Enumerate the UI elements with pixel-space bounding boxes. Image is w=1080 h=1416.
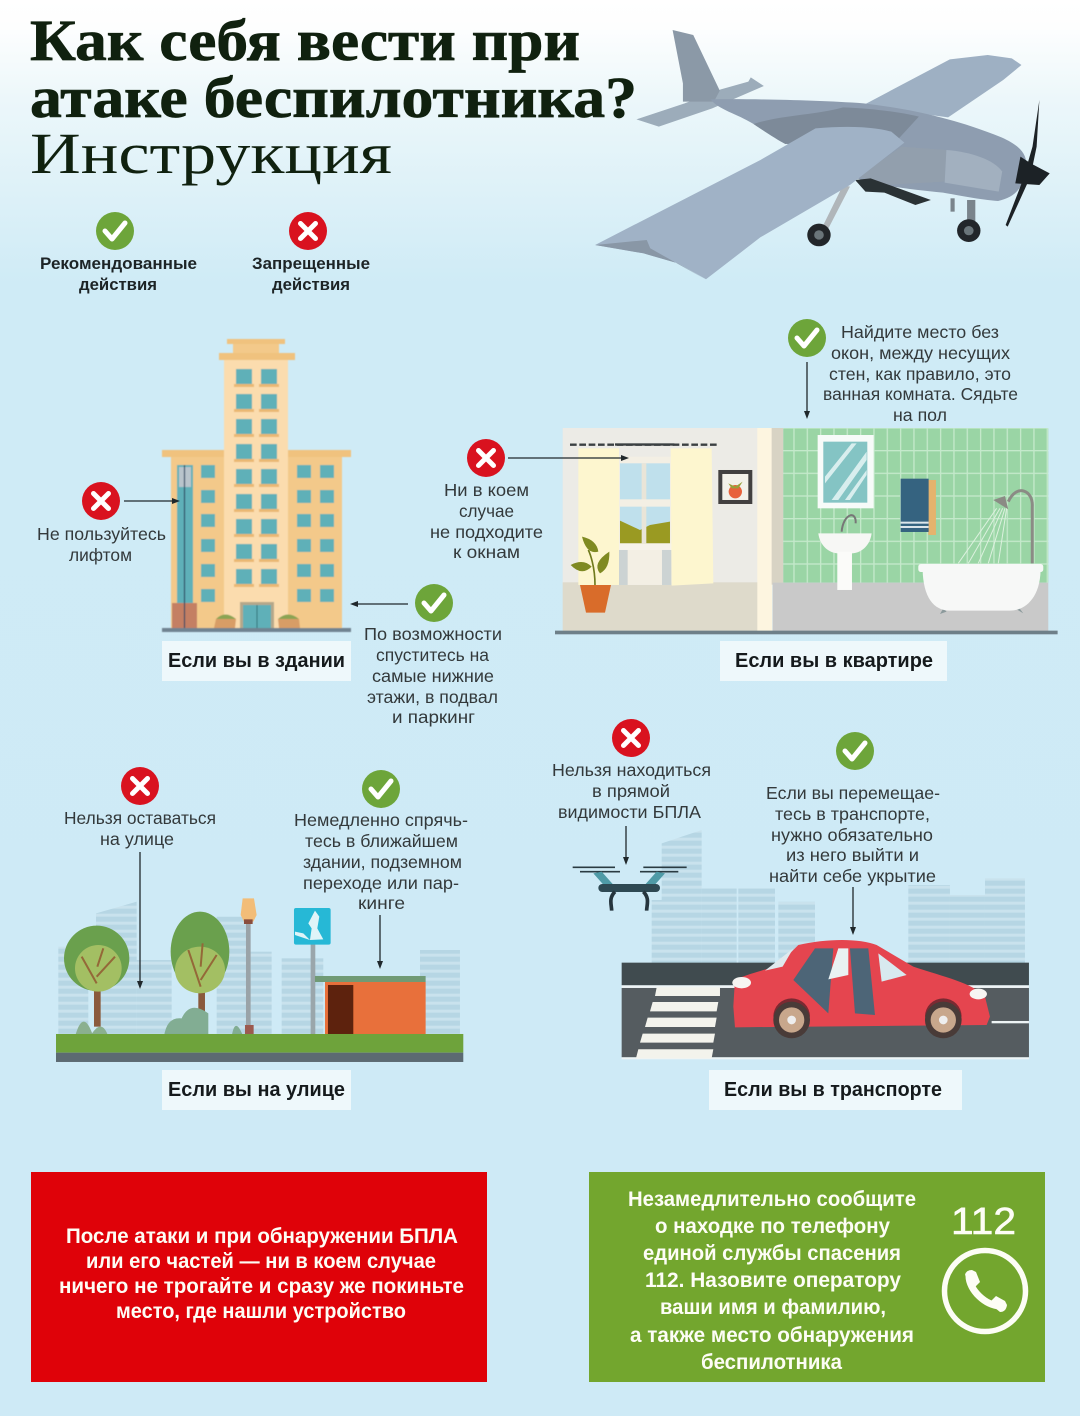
arrow: to elevator <box>124 498 180 504</box>
arrow: to drone <box>623 826 629 865</box>
callout: bathroom shelter: ванная комната. Сядьте <box>823 384 1018 404</box>
callout: avoid windows: не подходите <box>430 522 543 542</box>
icon: red cross <box>82 482 120 520</box>
legend: forbidden: действия <box>272 275 350 294</box>
road <box>622 963 1029 1059</box>
callout: no elevator: Не пользуйтесь <box>37 524 166 544</box>
callout: bathroom shelter: на пол <box>893 405 947 425</box>
callout: avoid windows: к окнам <box>453 542 520 562</box>
callout: line of sight: в прямой <box>592 781 670 801</box>
callout: leave vehicle <box>766 732 940 886</box>
curtain rod <box>570 441 717 448</box>
callout: go downstairs: По возможности <box>364 624 502 644</box>
callout: bathroom shelter: стен, как правило, это <box>829 364 1011 384</box>
callout: leave vehicle: тесь в транспорте, <box>775 804 930 824</box>
callout: go downstairs <box>364 584 502 727</box>
tree 1 <box>64 926 129 1037</box>
callout: go downstairs: спуститесь на <box>376 645 489 665</box>
title: Как себя вести при <box>30 8 580 73</box>
picture <box>718 470 752 504</box>
callout: hide immediately: кинге <box>358 893 405 913</box>
callout: leave vehicle: из него выйти и <box>786 845 919 865</box>
icon: red cross <box>289 212 327 250</box>
panel: after the attack: ничего не трогайте и сразу же покиньте <box>59 1275 464 1298</box>
callout: leave vehicle: Если вы перемещае- <box>766 783 940 803</box>
legend: recommended: действия <box>79 275 157 294</box>
icon: green check <box>415 584 453 622</box>
mirror <box>818 435 874 508</box>
arrow: to shelter <box>377 915 383 969</box>
skyline <box>58 902 460 1034</box>
arrow: to street <box>137 852 143 989</box>
callout: hide immediately: Немедленно спрячь- <box>294 810 468 830</box>
panel: call 112: о находке по телефону <box>655 1215 890 1238</box>
panel: call 112 <box>589 1172 1045 1382</box>
callout: line of sight: видимости БПЛА <box>558 802 701 822</box>
legend: recommended <box>40 212 197 294</box>
label: in transport <box>709 1070 962 1110</box>
icon: drone plane photo <box>595 30 1050 279</box>
title: Инструкция <box>30 121 392 186</box>
title: атаке беспилотника? <box>30 65 637 130</box>
icon: red cross <box>121 767 159 805</box>
callout: no elevator: лифтом <box>69 545 132 565</box>
street lamp <box>232 898 257 1040</box>
tree 2 <box>164 912 229 1037</box>
panel: call 112: ваши имя и фамилию, <box>660 1296 886 1319</box>
legend: forbidden <box>252 212 370 294</box>
label: in transport: Если вы в транспорте <box>724 1079 942 1101</box>
plant in pot <box>571 537 611 613</box>
panel: after the attack: После атаки и при обнаружении БПЛА <box>66 1225 458 1248</box>
window <box>618 457 672 585</box>
car <box>732 940 990 1038</box>
sink <box>818 515 872 590</box>
callout: avoid windows: Ни в коем <box>444 480 529 500</box>
callout: leave vehicle: найти себе укрытие <box>769 866 936 886</box>
panel: call 112: а также место обнаружения <box>630 1324 914 1347</box>
callout: avoid windows: случае <box>459 501 514 521</box>
label: on the street: Если вы на улице <box>168 1079 345 1101</box>
label: in building: Если вы в здании <box>168 650 345 672</box>
legend: forbidden: Запрещенные <box>252 254 370 273</box>
illustration: building <box>162 339 351 632</box>
callout: go downstairs: этажи, в подвал <box>367 687 498 707</box>
curtains <box>578 448 713 586</box>
callout: hide immediately: тесь в ближайшем <box>305 831 458 851</box>
callout: hide immediately: переходе или пар- <box>303 873 459 893</box>
icon: green check <box>362 770 400 808</box>
shelter <box>315 976 426 1035</box>
label: in apartment: Если вы в квартире <box>735 650 933 672</box>
panel: call 112: беспилотника <box>701 1351 842 1374</box>
arrow: to car <box>850 887 856 935</box>
icon: phone <box>944 1250 1026 1332</box>
illustration: road with car <box>573 830 1029 1059</box>
callout: avoid windows <box>430 439 543 562</box>
label: in building <box>162 641 351 681</box>
callout: line of sight <box>552 719 711 822</box>
icon: quadcopter <box>573 867 687 911</box>
callout: do not stay outside <box>64 767 216 849</box>
callout: bathroom shelter: Найдите место без <box>841 322 999 342</box>
towel <box>901 479 936 535</box>
callout: do not stay outside: на улице <box>100 829 174 849</box>
entrance door <box>240 602 274 628</box>
skyline <box>652 830 1025 963</box>
illustration: street <box>56 898 463 1062</box>
panel: after the attack: или его частей — ни в коем случае <box>86 1250 436 1273</box>
icon: green check <box>788 319 826 357</box>
callout: no elevator <box>37 482 166 565</box>
title <box>30 8 637 186</box>
underpass sign <box>294 908 331 1035</box>
callout: line of sight: Нельзя находиться <box>552 760 711 780</box>
callout: go downstairs: самые нижние <box>372 666 494 686</box>
shower and bathtub <box>918 491 1043 614</box>
callout: leave vehicle: нужно обязательно <box>771 825 933 845</box>
icon: green check <box>96 212 134 250</box>
panel: after the attack <box>31 1172 487 1382</box>
panel: call 112: 112. Назовите оператору <box>645 1269 901 1292</box>
illustration: apartment <box>555 428 1058 634</box>
panel: call 112: Незамедлительно сообщите <box>628 1188 916 1211</box>
label: on the street <box>162 1070 351 1110</box>
icon: green check <box>836 732 874 770</box>
label: in apartment <box>720 641 947 681</box>
arrow: to window <box>508 455 629 461</box>
legend: recommended: Рекомендованные <box>40 254 197 273</box>
arrow: to bathroom <box>804 362 810 419</box>
icon: red cross <box>467 439 505 477</box>
arrow: to building base <box>350 601 408 607</box>
panel: call 112: единой службы спасения <box>643 1242 901 1265</box>
callout: hide immediately <box>294 770 468 913</box>
callout: do not stay outside: Нельзя оставаться <box>64 808 216 828</box>
icon: red cross <box>612 719 650 757</box>
panel: after the attack: место, где нашли устройство <box>116 1300 406 1323</box>
callout: go downstairs: и паркинг <box>392 707 475 727</box>
callout: hide immediately: здании, подземном <box>303 852 462 872</box>
callout: bathroom shelter <box>788 319 1018 425</box>
callout: bathroom shelter: окон, между несущих <box>831 343 1010 363</box>
phone number: 112 <box>951 1201 1016 1243</box>
elevator shaft <box>172 465 197 628</box>
